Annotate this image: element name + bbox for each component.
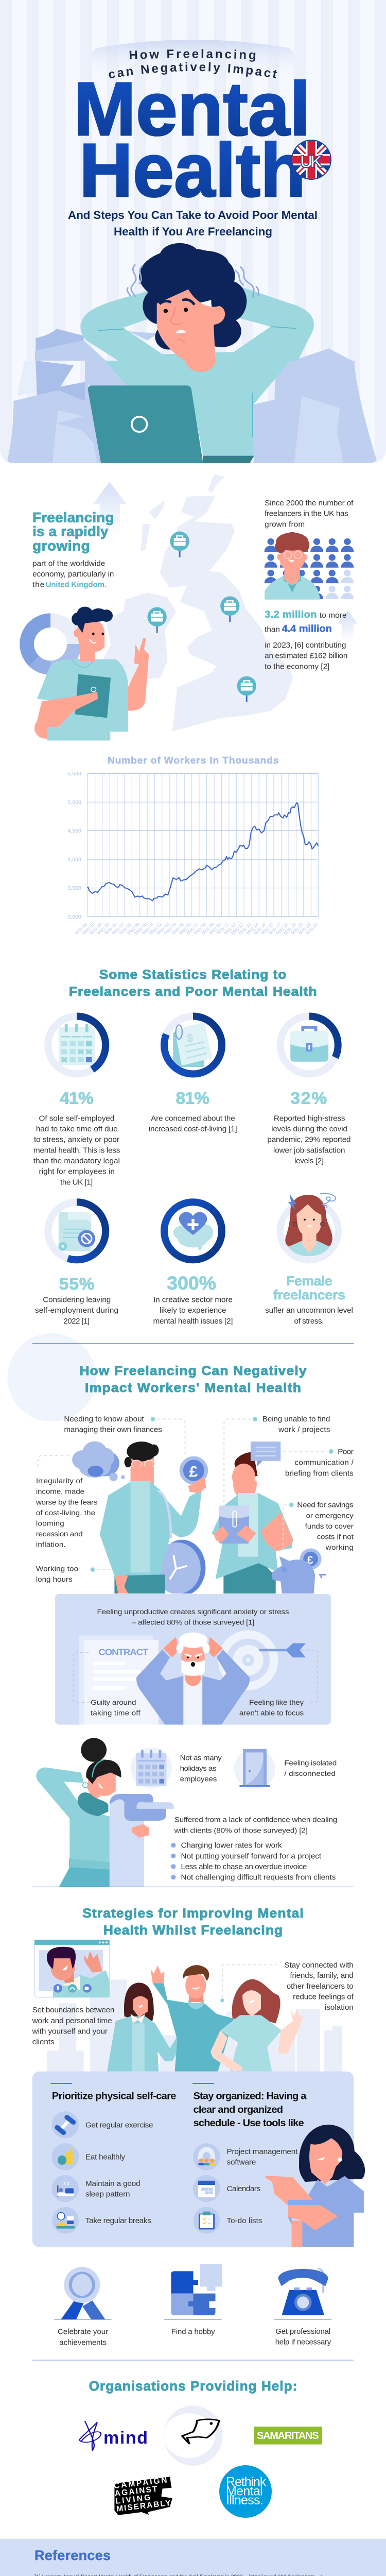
item: calendars [193,2175,260,2202]
text: finances: managing their own finances [64,1426,162,1434]
text: 32% description: Reported high-stress [274,1114,345,1123]
heading: strategies: Health Whilst Freelancing [103,1924,283,1938]
panel text: – affected 80% of those surveyed [1] [132,1619,255,1627]
title: Health: Health [79,128,306,213]
hero illustration: paper stacks and laptop [7,349,377,463]
text: irregularity of income: worse by the fears [36,1499,97,1506]
logo: campaign against living miserably: CAMPAIGN [113,2476,168,2490]
heading: prioritize: Prioritize physical self-care [52,2091,177,2102]
line chart: May 02 [148,922,163,936]
panel: unproductive anxiety [55,1594,331,1724]
icon: puzzle [164,2264,222,2319]
icon: UK flag badge [291,139,332,180]
text: savings: funds to cover [305,1523,354,1531]
line chart: May 92 [74,922,88,936]
icon: calendar holidays [130,1747,172,1789]
text: since 2000: Since 2000 the number of [265,499,354,507]
line chart: May 95 [96,922,111,936]
line chart: May 05 [170,922,185,936]
line chart: May 03 [155,922,170,936]
panel captions: aren’t able to focus [239,1709,304,1717]
subtitle [68,209,318,238]
stat: 3.2 million to 4.4 million: to the economy [2] [265,663,329,671]
heading: Freelancing is a rapidly growing: Freelancing [32,510,114,526]
line chart: May 00 [133,922,148,936]
text: economy [32,560,114,589]
icon captions [58,2216,331,2347]
item: project management software: software [227,2158,256,2166]
line chart: May 15 [253,922,267,936]
text: economy: the [32,581,44,589]
growth arrow left [93,482,127,536]
text: unable to find work: Being unable to find [262,1415,330,1423]
text: since 2000: freelancers in the UK has [265,510,348,518]
line chart: May 93 [81,922,96,936]
item: sleep: sleep pattern [85,2190,130,2198]
title: Mental: Mental [74,67,310,151]
text: poor communication: Poor [338,1448,354,1456]
panel captions: Guilty around [91,1699,136,1707]
logo: rethink mental illness: Illness. [226,2493,264,2507]
stat: 3.2 million to 4.4 million: to more [320,611,346,620]
icon: calendar [59,1025,95,1065]
lower part of panel and icons [32,2200,362,2466]
text: 81% description: increased cost-of-living [1] [149,1125,237,1133]
line chart: May 10 [208,922,222,936]
stat percent figures row one: 32% [290,1089,327,1107]
text: economy: part of the worldwide [32,560,105,568]
item: exercise: Get regular exercise [85,2121,153,2129]
text: irregularity of income: income, made [36,1488,84,1496]
caption: celebrate: Celebrate your [58,2328,108,2336]
subtitle: And Steps You Can Take to Avoid Poor Mental [68,209,318,222]
subtitle: Health if You Are Freelancing [114,225,272,238]
hero background [0,0,386,463]
logo: campaign against living miserably [113,2476,172,2515]
stat: 300% [153,1273,233,1326]
ring 300% [164,1202,222,1260]
text: set boundaries [32,2006,114,2046]
panel text: Feeling unproductive creates significant anxiety or stress [97,1608,289,1616]
how freelancing illustration section [36,1464,354,1835]
text: holidays: Not as many [180,1754,222,1762]
logo: campaign against living miserably: MISERABLY [116,2499,171,2514]
stat: female freelancers: of stress. [294,1317,324,1326]
text: savings: working [325,1544,354,1552]
icon grid: people [265,538,354,599]
text: economy: United Kingdom. [45,581,107,589]
bullet list [171,1841,336,1882]
stat: 300%: In creative sector more [153,1296,233,1304]
heading: stay organized: schedule - Use tools like [193,2117,304,2129]
text: 32% description: levels during the covid [271,1125,347,1133]
text: 32% description [267,1114,351,1165]
line chart: May 22 [305,922,319,936]
man with coin [100,1467,206,1594]
line chart: May 17 [268,922,282,936]
title: how freelancing: How Freelancing [130,49,255,62]
text: set boundaries: work and personal time [32,2016,112,2025]
stat: female freelancers: Female [286,1273,332,1289]
text: holidays: employees [180,1775,217,1784]
stat: 3.2 million to 4.4 million: in 2023, [6] contributing [265,641,346,650]
line chart: May 09 [200,922,215,936]
text: 41% description: mental health. This is less [33,1146,120,1155]
text: 81% description: Are concerned about the [151,1114,235,1123]
line chart: May 19 [283,922,297,936]
logo: mind symbol [79,2421,101,2450]
stat: 3.2 million to 4.4 million [265,609,358,671]
icon: blocked document [58,1212,95,1251]
text: holidays: holidays as [180,1765,216,1773]
line chart: 4,000 [68,857,81,863]
text: poor communication: briefing from clients [285,1469,354,1478]
stat: 300%: 300% [167,1273,216,1294]
coin icon: £ [189,1464,198,1480]
text: 32% description: pandemic, 29% reported [267,1136,351,1144]
stat percent figures row one: 81% [176,1089,209,1107]
donut chart behind man [20,613,81,675]
panel captions: taking time off [91,1709,141,1717]
icon: bill document [173,1022,212,1067]
panel captions: Feeling like they [249,1699,304,1707]
strategies section [32,1841,365,2247]
text: lack of confidence [174,1816,337,1835]
text: stay connected: isolation [325,2003,354,2012]
logo ring: fish [163,2405,222,2466]
line chart: May 11 [215,922,230,935]
coin icon [180,1456,208,1485]
text: isolated: Feeling isolated [284,1759,337,1767]
stat percent figures row one [60,1089,327,1107]
text: long hours: Working too [36,1565,78,1573]
logo text: mind: mind [103,2428,148,2448]
ring 32% [280,1016,338,1074]
line chart: May 12 [223,922,237,936]
line chart: May 21 [297,922,312,936]
stat: 300%: likely to experience [160,1306,226,1315]
item: exercise [51,2111,153,2139]
line chart: May 96 [103,922,118,936]
video call window [34,1940,110,1997]
line chart: May 94 [89,922,103,936]
friend: middle man [151,1965,234,2072]
text: set boundaries: with yourself and your [32,2027,108,2036]
caption: to-do lists: To-do lists [226,2216,262,2225]
bullet list: Not putting yourself forward for a project [181,1852,322,1860]
heading: how freelancing can negatively impact: How Freelancing Can Negatively [79,1364,307,1378]
woman with scroll [36,1738,174,1887]
caption: hobby: Find a hobby [171,2328,215,2336]
text: 41% description: had to take time off due [36,1125,118,1133]
man with glasses [265,532,320,600]
chart and statistics section [34,717,329,1067]
icon: stressed woman [285,1193,336,1256]
line chart: 4,500 [68,828,81,834]
heading: Freelancing is a rapidly growing: growing [32,538,90,553]
logo: rethink mental illness: Rethink [226,2475,267,2489]
text: lack of confidence: with clients (80% of those surveyed) [2] [174,1827,308,1835]
logo: campaign against living miserably: LIVING [115,2493,151,2506]
heading: stay organized [193,2091,307,2129]
ring 55% [48,1202,106,1260]
text: 41% description: to stress, anxiety or poor [34,1136,119,1144]
item: sleep [51,2175,141,2202]
heading: how freelancing can negatively impact: Impact Workers' Mental Health [85,1381,301,1395]
hero illustration: stressed woman [35,243,352,361]
text: isolated [284,1759,337,1778]
heading: Freelancing is a rapidly growing [32,510,114,553]
text: 41% description [33,1114,120,1187]
stat: 55%: 2022 [1] [63,1317,90,1326]
text: unable to find work [253,1415,330,1434]
logo: rethink mental illness: Mental [226,2484,263,2498]
stat: 3.2 million to 4.4 million: than [265,625,280,634]
caption: celebrate: achievements [59,2338,107,2347]
logo: rethink mental illness [219,2465,272,2518]
icon: medal [54,2267,112,2319]
text: irregularity of income [36,1478,97,1549]
heading: Freelancing is a rapidly growing: is a rapidly [32,523,108,539]
text: savings [283,1501,354,1552]
heading: stay organized: Stay organized: Having a [193,2091,307,2102]
line chart: May 98 [118,922,133,936]
item: sleep: z z [63,2181,69,2185]
text: savings: or emergency [306,1512,354,1520]
text: savings: costs if not [317,1533,354,1541]
clock [153,1540,207,1603]
line chart [68,771,319,936]
text: irregularity of income: inflation. [36,1541,66,1549]
icon: bill document: $ [187,1032,194,1044]
text: set boundaries: Set boundaries between [32,2006,114,2014]
speech bubble [233,1442,280,1500]
text: since 2000: grown from [265,520,305,529]
line chart: May 99 [126,922,141,936]
line chart: 5,500 [68,771,81,777]
text: set boundaries: clients [32,2038,55,2046]
text: stay connected: Stay connected with [284,1961,354,1970]
UK map section [20,474,358,732]
stat rings row two [48,1202,222,1260]
text: stay connected [220,1961,354,2012]
item: sleep: Maintain a good [85,2179,141,2188]
man head [125,1442,159,1490]
icon: UK flag badge: UK [300,152,323,172]
text: economy: economy, particularly in [32,570,114,579]
panel captions [91,1699,304,1717]
text: 41% description: right for employees in [39,1167,115,1176]
woman pointing lower [288,2200,362,2247]
stats text and how freelancing section [7,1114,354,1510]
stat: 3.2 million to 4.4 million: an estimated £162 billion [265,652,347,660]
stat: 3.2 million to 4.4 million: 4.4 million [282,623,332,635]
text: 81% description [149,1114,237,1133]
man with tablet [34,607,149,732]
stressed old man [136,1632,250,1724]
piggy bank [272,1549,326,1594]
ring 81% [164,1016,222,1074]
title arc panel [92,40,294,77]
logo: samaritans background [254,2427,322,2445]
piggy bank: £ [307,1554,313,1566]
title: can negatively impact: can Negatively Impact [109,62,277,78]
caption: professional help [275,2327,331,2347]
bullet list: Less able to chase an overdue invoice [181,1862,307,1871]
friend: left woman [107,1982,192,2072]
heading: organisations: Organisations Providing Help: [89,2378,297,2394]
city skyline [47,1979,342,2072]
line chart: May 01 [141,922,155,936]
stat: 3.2 million to 4.4 million: 3.2 million [265,609,317,620]
caption: regular breaks: Take regular breaks [85,2216,151,2225]
ring: female stress [280,1202,338,1260]
woman with folder [212,1464,293,1594]
caption: professional help: Get professional [275,2327,330,2336]
heading: how freelancing can negatively impact [79,1364,307,1395]
stat: 55%: self-employment during [35,1306,118,1315]
stat: 300%: mental health issues [2] [153,1317,233,1326]
icon: brain with heart [173,1212,213,1250]
line chart: May 13 [238,922,252,936]
line chart: May 18 [275,922,290,936]
target icon [218,1630,306,1690]
man shirt bottom [34,717,110,740]
line chart: 5,000 [68,800,81,805]
woman pointing [265,2125,365,2225]
stat: 55% [35,1274,118,1326]
text: isolated: / disconnected [284,1770,336,1778]
line chart: 3,500 [68,886,81,891]
map pins [148,532,256,702]
logo text: samaritans: SAMARITANS [257,2430,319,2442]
stat rings row one [48,1016,338,1074]
text: finances [64,1415,162,1434]
text: stay connected: other freelancers to [287,1982,354,1991]
stat: female freelancers [265,1273,353,1326]
panel: self-care and organisation [32,2072,365,2247]
group of friends [107,1965,303,2072]
chart title: Number of Workers In Thousands [108,755,278,766]
item: project management software: Project management [227,2147,298,2156]
line chart: May 97 [111,922,126,936]
icon: telephone [274,2268,331,2319]
text: irregularity of income: looming [36,1520,64,1528]
stat: female freelancers: suffer an uncommon level [265,1306,353,1315]
references heading: References [34,2548,111,2563]
decorative circle [7,1333,96,1421]
item: to-do lists icon [193,2207,220,2234]
uk map [98,474,293,732]
icon: briefcase [290,1027,329,1062]
line chart: May 16 [260,922,274,936]
text: long hours [36,1565,157,1584]
text: unable to find work: work / projects [278,1426,330,1434]
contract document [79,1636,159,1724]
text: 41% description: than the mandatory legal [33,1157,120,1165]
stat: 55%: Considering leaving [43,1296,111,1304]
item: project management software [193,2143,298,2171]
line chart: May 04 [163,922,178,936]
caption: celebrate [58,2328,108,2347]
text: irregularity of income: recession and [36,1530,83,1538]
panel: references [0,2539,386,2576]
connector lines [38,1419,327,1510]
stat percent figures row one: 41% [60,1089,94,1107]
text: irregularity of income: of cost-living, the [36,1509,95,1517]
text: irregularity of income: Irregularity of [36,1478,83,1485]
text: 41% description: the UK [1] [60,1178,93,1187]
bullet list: Charging lower rates for work [181,1841,282,1850]
icon: door [234,1749,275,1789]
line chart: May 07 [185,922,200,936]
line chart: May 06 [178,922,192,936]
text: poor communication: communication / [295,1459,354,1467]
heading: some statistics: Freelancers and Poor Mental Health [69,985,317,999]
stat: 55%: 55% [59,1274,95,1293]
item: regular breaks icon [52,2207,79,2234]
bullet list: Not challenging difficult requests from clients [181,1873,336,1882]
thought cloud [72,1442,119,1478]
text: finances: Needing to know about [64,1415,145,1423]
stat: female freelancers: freelancers [273,1287,345,1302]
text: 32% description: levels [2] [294,1157,324,1165]
text: 32% description: lower job satisfaction [273,1146,345,1155]
connector lines panel [73,1650,318,1702]
heading: some statistics [69,968,317,999]
panel text [97,1608,289,1627]
text: long hours: long hours [36,1576,73,1584]
contract document: CONTRACT [98,1647,148,1657]
line chart: 3,000 [68,914,81,920]
text: poor communication [285,1448,354,1478]
text: since 2000 [265,499,354,529]
bubbles [87,1466,125,1481]
line chart: May 20 [290,922,304,936]
heading: strategies [82,1907,304,1938]
caption: professional help: help if necessary [275,2338,331,2347]
heading: stay organized: clear and organized [193,2104,283,2115]
text: 41% description: Of sole self-employed [39,1114,114,1123]
line chart: May 08 [192,922,207,936]
text: holidays [180,1754,222,1784]
friend: right woman [210,1979,303,2072]
item: eat healthily [51,2143,125,2171]
text: stay connected: friends, family, and [290,1971,354,1980]
line chart: May 13 [230,922,244,936]
text: savings: Need for savings [297,1501,354,1509]
line chart: May 14 [245,922,260,936]
ring 41% [48,1016,106,1074]
text: lack of confidence: Suffered from a lack of confidence when dealing [174,1816,337,1824]
text: stay connected: reduce feelings of [293,1993,354,2001]
woman head [233,1452,258,1500]
item: calendars: Calendars [227,2184,260,2193]
logo: campaign against living miserably: AGAINST [114,2485,158,2498]
heading: some statistics: Some Statistics Relating to [99,968,286,982]
item: eat healthily: Eat healthly [85,2153,125,2161]
heading: strategies: Strategies for Improving Mental [82,1907,304,1921]
